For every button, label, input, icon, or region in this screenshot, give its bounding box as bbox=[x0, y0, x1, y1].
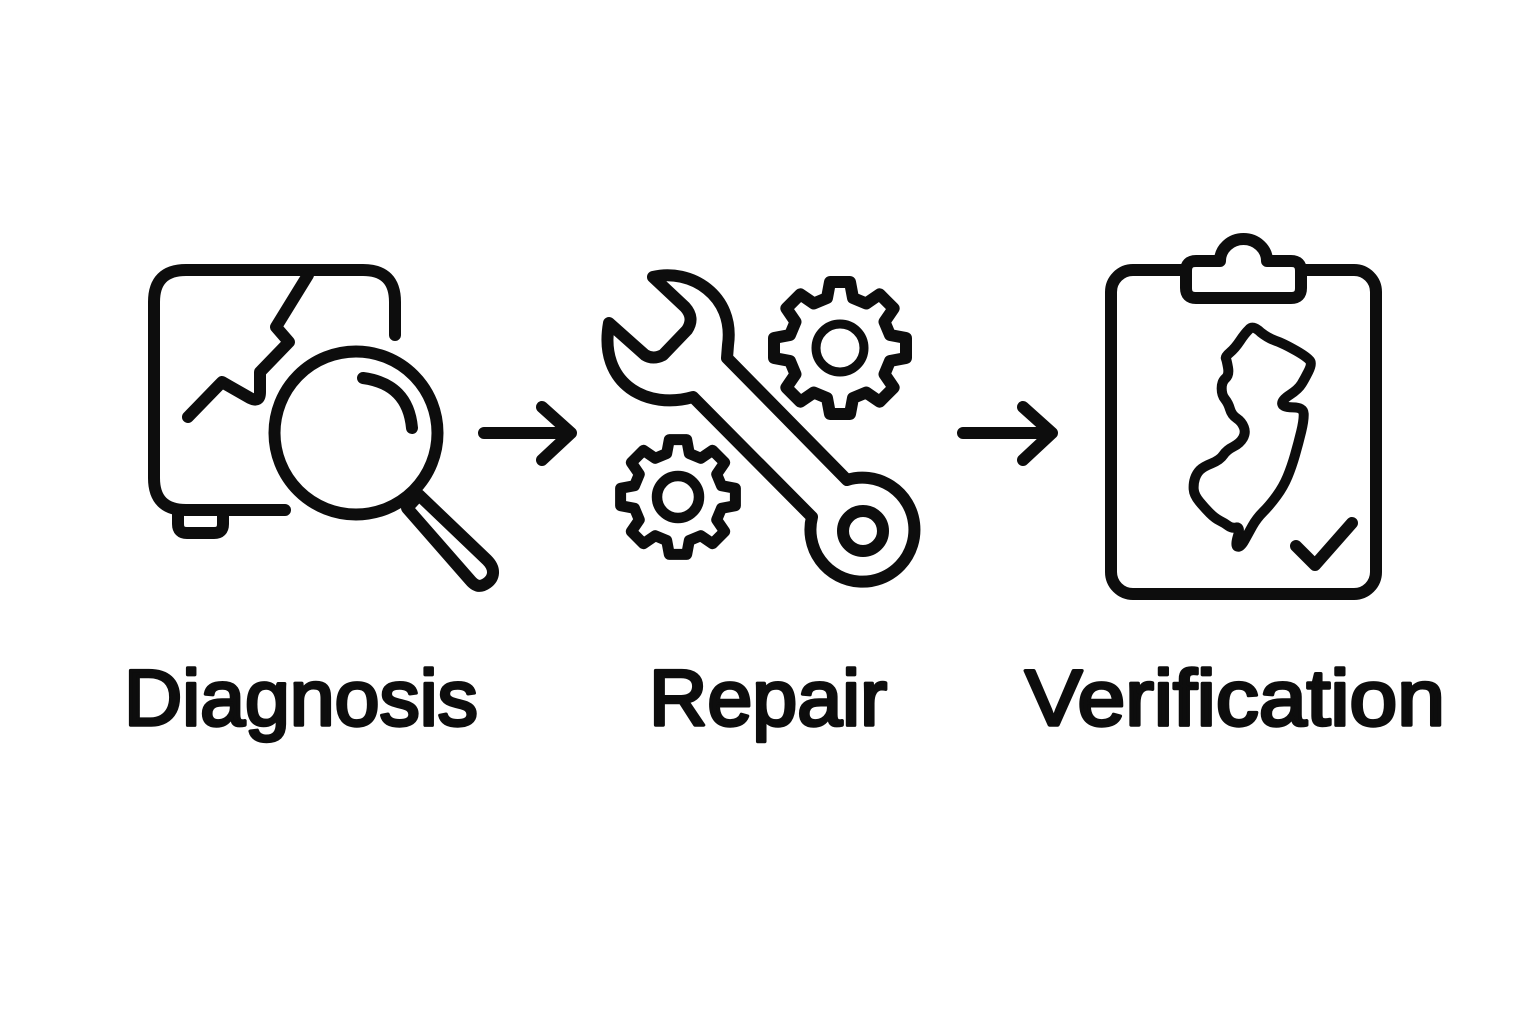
unit body outline bbox=[154, 270, 395, 510]
magnifying glass handle bbox=[407, 495, 493, 586]
New Jersey state outline bbox=[1194, 328, 1311, 547]
upper gear bbox=[774, 282, 906, 414]
wrench outline bbox=[607, 275, 914, 582]
lower gear bbox=[621, 440, 735, 554]
icon: cracked unit under magnifying glass bbox=[154, 270, 493, 586]
crack line bbox=[188, 275, 308, 417]
wrench ring hole bbox=[843, 511, 883, 551]
magnifying glass lens bbox=[274, 352, 438, 514]
icon: clipboard with New Jersey outline and check bbox=[1111, 239, 1376, 594]
arrow: diagnosis to repair bbox=[484, 407, 571, 460]
arrow: repair to verification bbox=[963, 407, 1052, 460]
unit foot bbox=[178, 512, 223, 533]
clipboard clip bbox=[1186, 239, 1301, 298]
icon: wrench and gears bbox=[607, 275, 914, 582]
clipboard board bbox=[1111, 270, 1376, 594]
label: Verification: Verification bbox=[1025, 653, 1445, 742]
label: Repair: Repair bbox=[649, 653, 887, 742]
lens highlight bbox=[363, 378, 412, 428]
label: Diagnosis: Diagnosis bbox=[124, 653, 478, 742]
check mark bbox=[1296, 523, 1352, 565]
